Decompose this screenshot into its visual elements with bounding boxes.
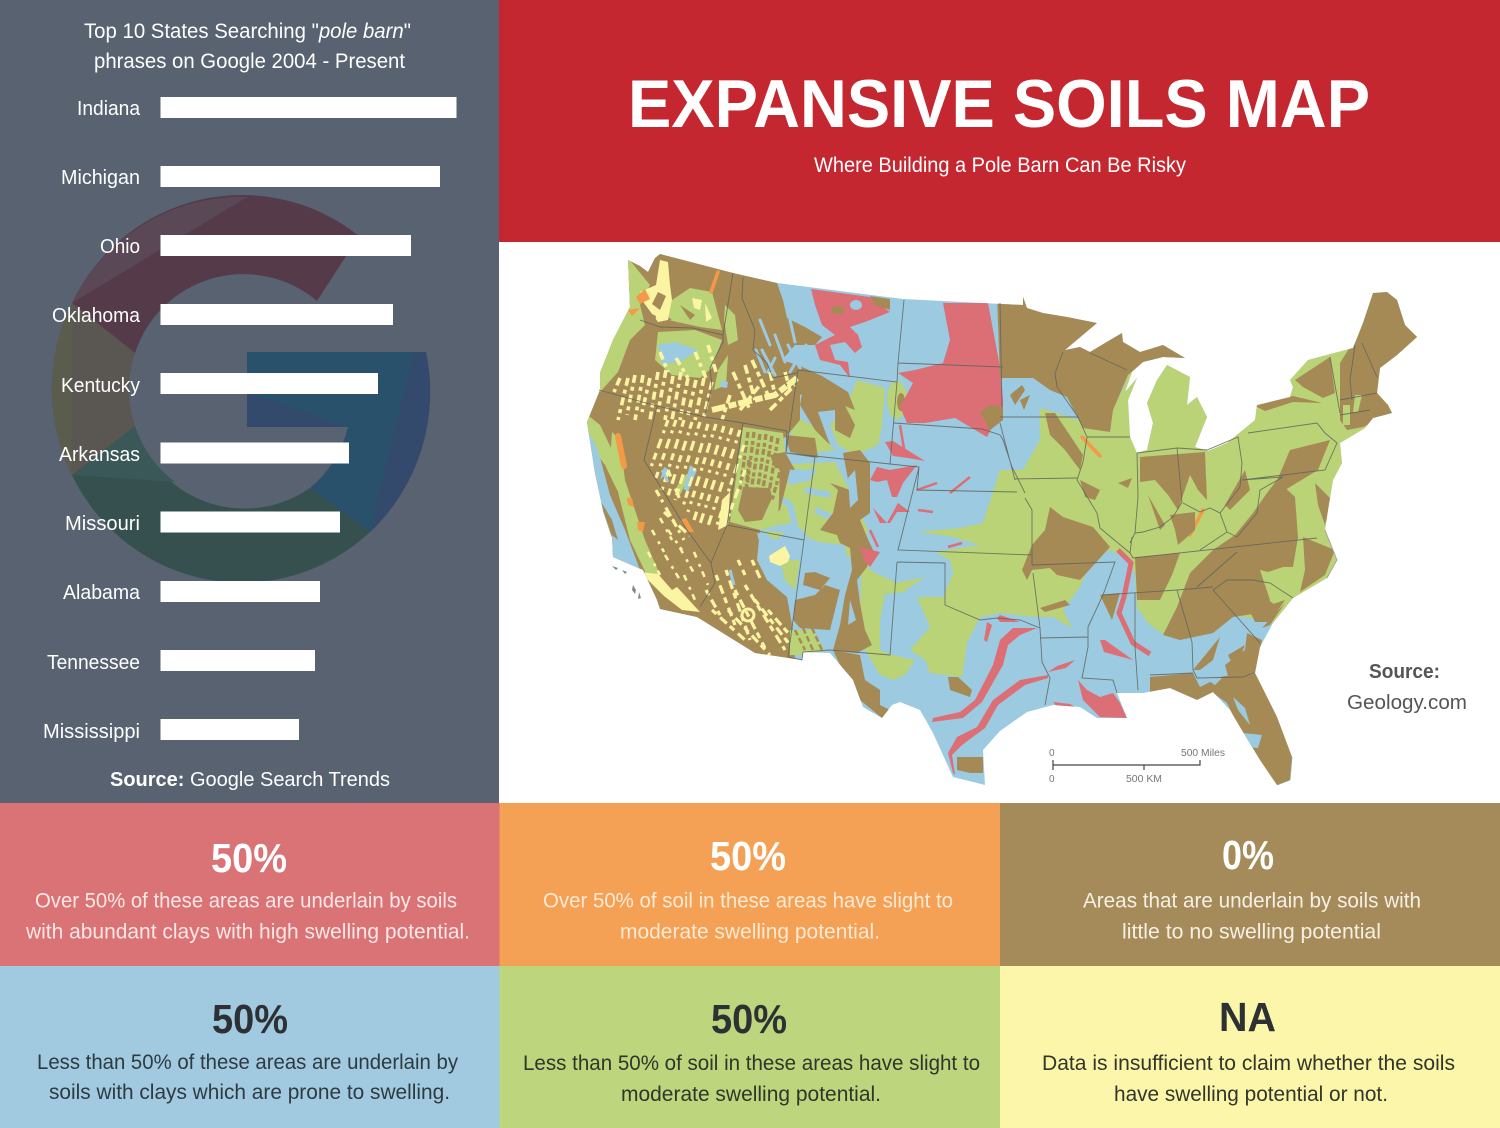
bar: Alabama: Alabama [63,581,141,604]
soil: high clay Louisiana delta (red) [1053,680,1127,718]
bar: Mississippi [43,719,299,743]
soil: Arizona-New Mexico patches (brown) [793,572,840,630]
soil: Illinois and Indiana (brown) [1080,452,1207,510]
soil: Appalachian plateau (brown) [1163,480,1298,640]
panel: slight to moderate, under 50%: Less than 50% of soil in these areas have slight to [523,1051,980,1075]
map source note: Geology.com [1347,692,1467,714]
soil: high clay Mississippi valley strips (red) [1118,550,1150,654]
chart title [84,20,411,73]
soil: Black Hills ring (green) [887,381,907,419]
header banner [499,0,1500,242]
panel: little to no swelling [1000,803,1500,966]
soil: high clay northern Montana (red) [811,289,890,378]
soil: Atlantic coastal plain (brown) [1300,483,1335,592]
bar: Indiana: Indiana [77,97,141,120]
bar: Michigan [61,166,440,189]
soil: Utah streaks (brown) [740,432,784,505]
soil: moderate orange patches [618,436,624,466]
panel: clays prone to swelling, under 50%: 50% [212,996,288,1042]
soil: low clay base (blue) [570,240,1440,800]
bar: Oklahoma [52,304,393,327]
panel: slight to moderate, over 50% [500,803,1000,966]
soil: Kentucky (brown) [1148,470,1250,545]
bar: Alabama [63,581,320,604]
soil: Washington and Oregon plateau (green) [668,288,722,330]
soil: Nevada-Utah border wet basins (blue) [662,468,734,585]
panel: high swelling, over 50% [0,803,500,966]
bar: Mississippi: Mississippi [43,720,140,743]
subtitle: Where Building a Pole Barn Can Be Risky [814,154,1186,177]
panel: little to no swelling: 0% [1222,832,1274,878]
soil: New Mexico basin (blue) [813,542,847,563]
soil: Texas Big Bend, Balcones and south Texas (brown) [833,650,890,718]
soil: high clay Texas strips (red) [932,628,1037,722]
soil: Four Corners (blue) [757,533,760,541]
bar: Ohio: Ohio [100,235,140,258]
panel: high swelling, over 50%: with abundant clays with high swelling potential. [25,920,470,944]
icon: Google G watermark [52,195,430,583]
panel: high swelling, over 50%: 50% [211,835,287,881]
soil: Wyoming and Colorado patches (green) [775,380,885,560]
panel: insufficient data [1000,966,1500,1128]
soil: high clay Dakotas (red) [898,303,1003,437]
bar: Kentucky [61,373,378,397]
panel: clays prone to swelling, under 50% [0,966,500,1128]
map source note: Source: [1369,661,1440,683]
soil: New York and New England (brown) [1295,357,1335,398]
chart title: phrases on Google 2004 - Present [94,50,405,73]
islands [612,566,641,599]
panel: slight to moderate, over 50%: 50% [710,833,786,879]
soil: Lake Powell blob (yellow) [769,546,790,566]
panel: slight to moderate, over 50%: Over 50% of soil in these areas have slight to [543,888,953,912]
chart source: Source: Google Search Trends [110,768,390,791]
bar: Kentucky: Kentucky [61,374,141,397]
soil: insufficient data, Washington (yellow) [640,260,672,322]
soil: Great Basin flecks (yellow) [650,420,745,540]
soil: Florida and panhandle (brown) [1150,673,1300,790]
panel: little to no swelling: Areas that are underlain by soils with [1083,888,1421,912]
bar: Tennessee [47,650,315,674]
soil: Colorado-New Mexico spine (brown) [820,450,873,653]
panel: slight to moderate, under 50%: 50% [711,996,787,1042]
panel: little to no swelling: little to no swelling potential [1122,920,1381,944]
left panel background [0,0,499,803]
bar: Oklahoma: Oklahoma [52,304,141,327]
map scale bar: 0 [1049,748,1055,759]
state boundary lines [599,273,1377,705]
soil: west mountain (brown) [587,254,855,659]
bar: Indiana [77,97,456,120]
soil: Utah and Four Corners (green) [730,427,786,530]
panel: clays prone to swelling, under 50%: Less than 50% of these areas are underlain by [37,1050,458,1074]
panel: insufficient data: have swelling potential or not. [1114,1082,1388,1106]
bar: Arkansas: Arkansas [59,443,140,466]
panel: clays prone to swelling, under 50%: soils with clays which are prone to swelling. [49,1080,450,1104]
bar: Missouri: Missouri [65,512,140,535]
map scale bar: 500 KM [1126,774,1162,785]
soil: Pacific coast green [600,260,650,392]
chart title: Top 10 States Searching "pole barn" [84,20,411,43]
panel: slight to moderate, under 50%: moderate swelling potential. [621,1082,881,1106]
soil: west Texas and New Mexico strip (green) [860,560,925,680]
map scale bar: 0 [1049,774,1055,785]
bar: Ohio [100,235,411,258]
bar: Missouri [65,512,340,535]
bar: Michigan: Michigan [61,166,140,189]
soil: Ozarks (brown) [1022,507,1110,580]
map source note [1347,661,1467,714]
panel: insufficient data: Data is insufficient to claim whether the soils [1042,1051,1455,1075]
soil: Montana river fingers (blue) [756,320,806,375]
title: EXPANSIVE SOILS MAP [628,66,1370,142]
map coastline [603,510,1337,785]
soil: Idaho-Utah band (yellow) [712,378,797,410]
soil: New Mexico north patch (green) [813,543,837,563]
soil: south Oregon flecks (yellow) [614,345,716,420]
soil: western Colorado interior (blue) [780,468,832,528]
panel: slight to moderate, under 50% [500,966,1000,1128]
panel: insufficient data: NA [1219,994,1276,1040]
panel: high swelling, over 50%: Over 50% of these areas are underlain by soils [35,888,457,912]
soil: high clay Colorado and Kansas streaks (red) [870,465,917,497]
soil: southern California desert (yellow) [640,572,700,612]
bar: Arkansas [59,442,349,466]
bar chart: top 10 states [43,97,456,743]
soil: Wyoming-Big Horn patches (brown) [800,390,855,445]
panel: slight to moderate, over 50%: moderate swelling potential. [620,920,880,944]
bar: Tennessee: Tennessee [47,651,140,674]
soil: Tennessee and Mississippi (brown) [1100,553,1180,620]
soil: Minnesota and Wisconsin (brown) [997,295,1200,432]
map scale bar [1049,748,1225,785]
soil: Arizona flecks (yellow) [706,560,790,655]
soil: moderate, plains and eastern (green) [910,280,1430,677]
map: expansive soils of the contiguous US [587,254,1417,786]
map scale bar: 500 Miles [1181,748,1225,759]
